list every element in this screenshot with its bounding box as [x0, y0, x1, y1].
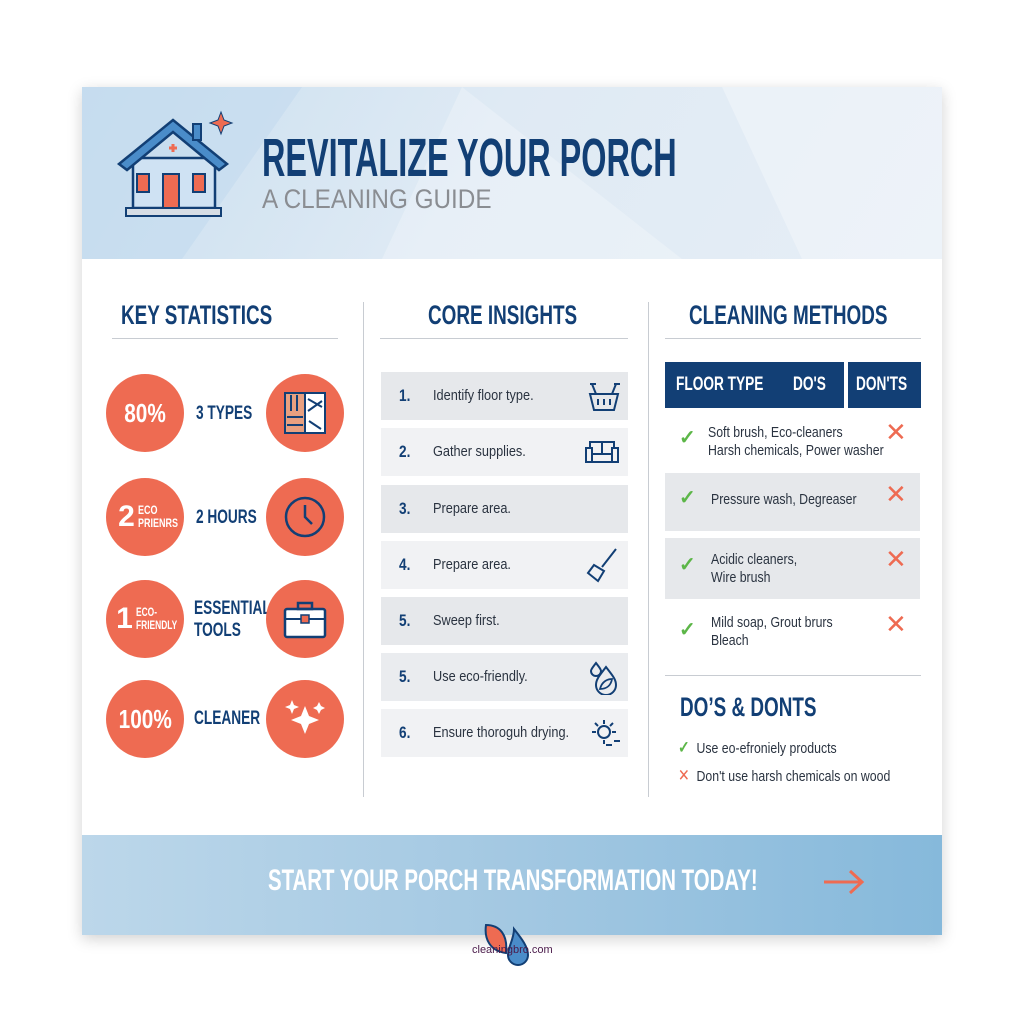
- stat 2 eco: ECO: [138, 503, 157, 517]
- do's and donts: ✕ Don't use harsh chemicals on wood: [678, 766, 890, 785]
- step 3: [381, 485, 628, 533]
- stat 100%: CLEANER: [194, 708, 260, 729]
- step 2: [381, 428, 628, 476]
- header: [82, 87, 942, 259]
- step 1: Identify floor type.: [433, 387, 534, 404]
- table row 2: [665, 473, 920, 531]
- heading: cleaning methods: CLEANING METHODS: [689, 300, 887, 330]
- step 3: Prepare area.: [433, 500, 511, 517]
- step 6: [381, 653, 628, 701]
- stat 2 eco: PRIENRS: [138, 516, 178, 530]
- stat 80%: 80%: [124, 398, 166, 428]
- table row 1: [679, 417, 907, 459]
- table row 3: ✓: [679, 554, 696, 576]
- step 6: Use eco-friendly.: [433, 668, 528, 685]
- title: REVITALIZE YOUR PORCH: [262, 128, 677, 188]
- card: [82, 87, 942, 935]
- heading: key statistics: KEY STATISTICS: [121, 300, 272, 330]
- table row 2: ✕: [885, 479, 907, 509]
- step 4: Prepare area.: [433, 556, 511, 573]
- step 5: 5.: [399, 611, 410, 630]
- table row 3: ✕: [885, 544, 907, 574]
- table row 4: Bleach: [711, 632, 749, 649]
- heading: core insights: CORE INSIGHTS: [428, 300, 577, 330]
- do's and donts: DO’S & DONTS: [680, 692, 817, 722]
- stat 2 eco: 2: [118, 500, 135, 533]
- step 1: 1.: [399, 386, 410, 405]
- table row 4: ✕: [885, 609, 907, 639]
- stat 80%: 3 TYPES: [196, 403, 252, 424]
- step 7: [381, 709, 628, 757]
- table header: DON'TS: [856, 374, 907, 395]
- stat 1 eco: [106, 580, 344, 658]
- do's and donts: [678, 692, 890, 785]
- arrow: [824, 870, 864, 894]
- stat 2 eco: 2 HOURS: [196, 507, 257, 528]
- table row 2: Pressure wash, Degreaser: [711, 491, 857, 508]
- table row 3: Wire brush: [711, 569, 770, 586]
- icon: house: [117, 110, 234, 217]
- step 7: Ensure thoroguh drying.: [433, 724, 569, 741]
- table row 3: [665, 538, 920, 599]
- call to action: START YOUR PORCH TRANSFORMATION TODAY!: [268, 864, 758, 897]
- stat 80%: [106, 374, 344, 452]
- step 3: 3.: [399, 499, 410, 518]
- table row 4: Mild soap, Grout brurs: [711, 614, 833, 631]
- table header: [665, 362, 921, 408]
- step 4: [381, 541, 628, 589]
- stat 1 eco: FRIENDLY: [136, 618, 177, 632]
- table row 4: [679, 609, 907, 649]
- logo: [472, 924, 553, 966]
- table row 1: ✕: [885, 417, 907, 447]
- table header: DO'S: [793, 374, 826, 395]
- table header: FLOOR TYPE: [676, 374, 763, 395]
- table row 1: Harsh chemicals, Power washer: [708, 442, 884, 459]
- stat 1 eco: 1: [116, 602, 133, 635]
- footer banner: [82, 835, 942, 935]
- step 2: Gather supplies.: [433, 443, 526, 460]
- stat 1 eco: ECO-: [136, 605, 157, 619]
- table row 2: ✓: [679, 487, 696, 509]
- do's and donts: ✓ Use eo-efroniely products: [678, 738, 837, 757]
- step 2: 2.: [399, 442, 410, 461]
- stat 100%: 100%: [118, 704, 172, 734]
- step 6: 5.: [399, 667, 410, 686]
- stat 1 eco: ESSENTIAL: [194, 598, 271, 619]
- table row 3: Acidic cleaners,: [711, 551, 797, 568]
- subtitle: A CLEANING GUIDE: [262, 184, 492, 214]
- table row 1: Soft brush, Eco-cleaners: [708, 424, 843, 441]
- step 4: 4.: [399, 555, 410, 574]
- step 5: Sweep first.: [433, 612, 500, 629]
- logo: cleaningbro.com: [472, 944, 553, 956]
- table row 1: ✓: [679, 427, 696, 449]
- step 5: [381, 597, 628, 645]
- step 7: 6.: [399, 723, 410, 742]
- step 1: [381, 372, 628, 420]
- stat 1 eco: TOOLS: [194, 620, 241, 641]
- table row 4: ✓: [679, 619, 696, 641]
- stat 100%: [106, 680, 344, 758]
- stat 2 eco: [106, 478, 344, 556]
